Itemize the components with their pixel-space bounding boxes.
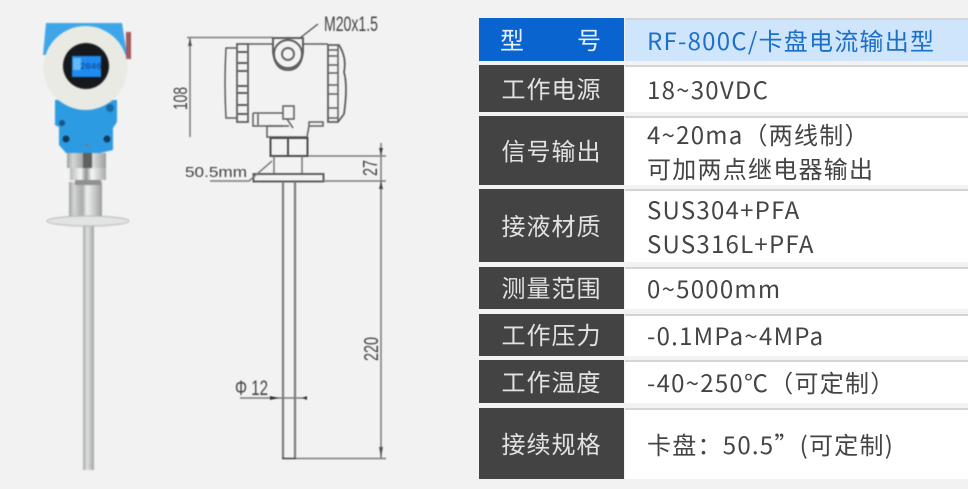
row: model (479, 18, 968, 61)
row: range: 测量范围 (502, 269, 602, 304)
row: model: 号 (577, 20, 601, 56)
blue top housing (43, 23, 131, 59)
clamp flange (254, 174, 324, 182)
row: power (479, 65, 968, 112)
row: connection (479, 408, 968, 479)
display window (63, 43, 109, 89)
row: signal: 可加两点继电器输出 (647, 150, 874, 184)
cable gland M20x1.5 (273, 13, 378, 70)
row: range: 0~5000mm (647, 270, 781, 305)
dimension 220 (296, 193, 386, 458)
product photo: radar level transmitter (42, 22, 132, 471)
row: range (479, 267, 968, 309)
row: signal: 4~20ma（两线制） (647, 116, 870, 151)
probe (282, 182, 296, 458)
dimension phi 12 (235, 377, 307, 400)
row: temperature (479, 360, 968, 403)
dimension 50.5mm (185, 161, 272, 181)
row: wetted material: SUS304+PFA (647, 191, 800, 226)
row: pressure: 工作压力 (502, 316, 602, 351)
row: temperature: 工作温度 (502, 362, 602, 398)
dimension 27: 27 (360, 160, 382, 176)
row: power: 18~30VDC (647, 71, 769, 106)
row: wetted material: 接液材质 (502, 206, 602, 242)
row: model: RF-800C/卡盘电流输出型 (647, 22, 935, 57)
cable gland M20x1.5: M20x1.5 (324, 13, 378, 36)
white cover ring (44, 26, 128, 110)
housing outline (225, 44, 346, 137)
row: pressure (479, 314, 968, 356)
dimension 27 (308, 143, 386, 193)
probe rod (83, 224, 94, 470)
blue lower housing (55, 100, 117, 153)
row: wetted material (479, 189, 968, 262)
dimension 220: 220 (361, 337, 383, 361)
row: wetted material: SUS316L+PFA (647, 224, 815, 260)
dimension 50.5mm: 50.5mm (185, 164, 247, 181)
LCD screen: 2046 (80, 62, 102, 72)
row: power: 工作电源 (502, 70, 602, 104)
row: signal: 信号输出 (502, 132, 602, 166)
row: temperature: -40~250℃（可定制） (647, 364, 896, 399)
nut and neck (270, 138, 308, 174)
row: connection: 接续规格 (502, 424, 602, 460)
dimension 108: 108 (171, 87, 192, 110)
row: signal (479, 116, 968, 185)
LCD screen (72, 56, 102, 77)
spec table (479, 18, 968, 479)
row: model: 型 (500, 20, 524, 56)
clamp flange (47, 182, 129, 226)
row: pressure: -0.1MPa~4MPa (647, 317, 824, 352)
hex fitting (67, 153, 106, 185)
dimension phi 12: Φ 12 (235, 377, 268, 400)
row: connection: 卡盘：50.5”(可定制) (647, 426, 894, 461)
dimension 108 (171, 38, 273, 137)
